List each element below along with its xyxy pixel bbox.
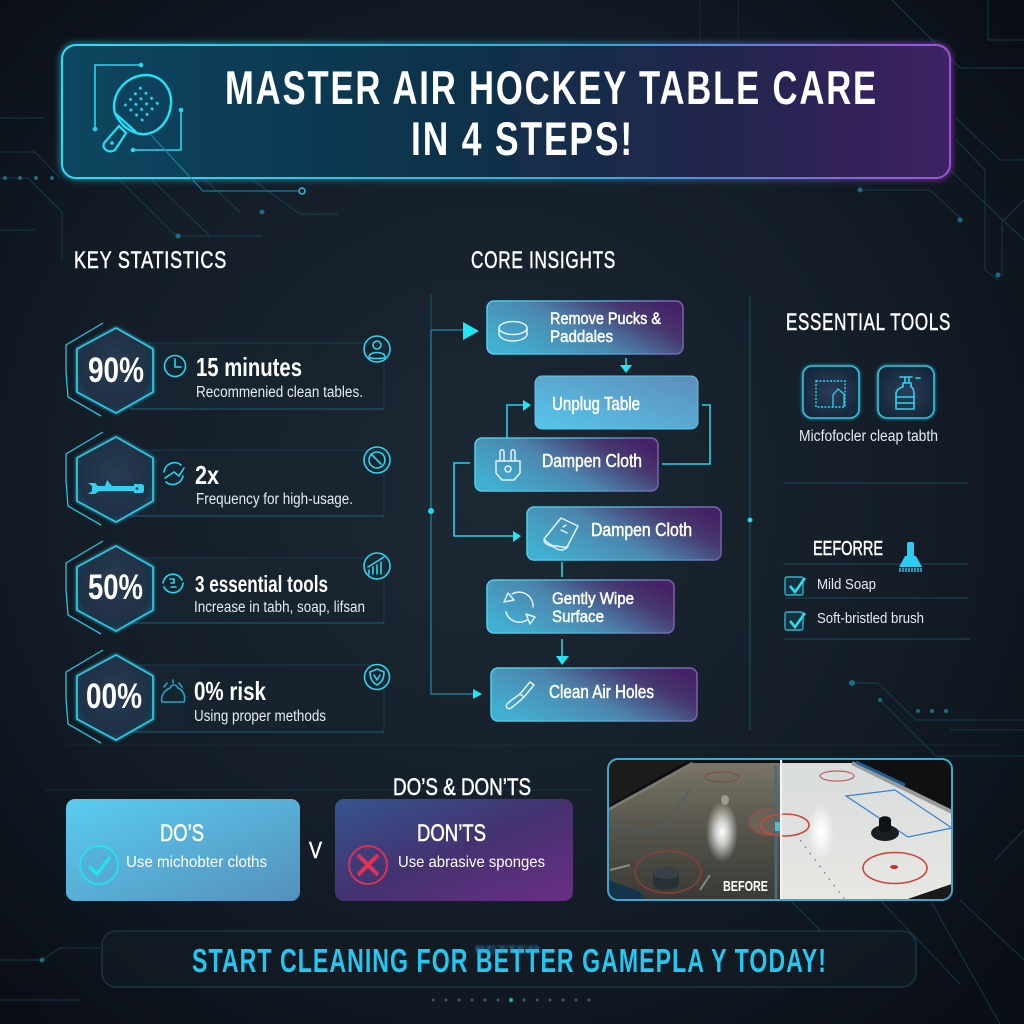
step label: Dampen Cloth [591,520,692,540]
panel: do's: DO’S [160,820,204,847]
panel: stat 50% [66,541,390,634]
dim vertical dividers [431,294,750,730]
panel: do's [66,799,300,901]
panel: do's: Use michobter cloths [126,854,267,871]
title banner [62,45,950,178]
call to action bar [102,931,916,987]
stat text [194,676,326,725]
icon: cycle [163,574,183,593]
panel: don'ts: DON’TS [417,820,486,847]
heading: key statistics: KEY STATISTICS [74,247,227,274]
icon: cloth [544,518,578,550]
icon: plug [496,450,520,480]
stat text: 2x [195,460,219,490]
stat text: 15 minutes [196,352,302,382]
hexagon value [77,328,153,413]
panel: stat 00% [66,650,390,743]
icon: rising bars [364,553,390,579]
icon: check circle [80,846,118,884]
before label: BEFORE [723,878,768,895]
step label: Remove Pucks & [550,309,662,328]
step label: Gently Wipe [552,589,634,608]
icon: refresh [164,463,184,484]
stat text [194,571,365,616]
icon: cross circle [349,846,387,884]
flow connectors [428,322,752,699]
hexagon value [77,546,153,631]
heading: essential tools: ESSENTIAL TOOLS [786,309,951,336]
icon: microfiber cloth tile [803,366,859,418]
tools caption: Micfofocler cleap tabth [799,428,938,445]
check item: mild soap: Mild Soap [817,576,876,593]
step label [550,309,662,346]
icon: puck [499,322,527,341]
step label [552,589,634,626]
flow step: dampen cloth [527,507,721,560]
after half [761,759,952,900]
title text [225,61,878,165]
hexagon value: 90% [88,351,144,390]
step label: Paddales [550,327,613,346]
hexagon value: 50% [88,568,143,607]
stat text: Recommenied clean tables. [196,384,363,401]
step label: Clean Air Holes [549,682,654,702]
hexagon with wrench [77,437,153,522]
stat text: 3 essential tools [195,571,328,597]
panel: essential tools [783,366,970,639]
checklist heading: EEFORRE [813,538,883,560]
hexagon value: 00% [86,677,142,716]
heading: core insights: CORE INSIGHTS [471,247,616,274]
step label: Unplug Table [552,394,640,414]
stat text [196,352,363,401]
call to action bar: BETTER [475,945,540,956]
step label: Surface [552,607,604,626]
checklist: before [785,538,924,630]
photo: before and after table [608,759,952,900]
flow step: gently wipe surface [487,580,674,633]
icon: spray bottle tile [878,366,934,418]
title text: IN 4 STEPS! [411,112,634,165]
panel: don'ts [335,799,573,901]
stat text [195,460,353,508]
icon: clock [164,356,186,376]
flow step: clean air holes [491,668,697,721]
icon: person [364,336,390,362]
icon: gauge [364,447,390,473]
panel: stat 90% [66,323,390,416]
icon: small brush [506,682,534,709]
hexagon value [77,655,153,740]
pagination dots [432,998,590,1002]
before half [608,759,791,900]
flow step: unplug table [535,376,698,429]
check item: soft brush: Soft-bristled brush [817,610,924,627]
stat text: 0% risk [194,676,266,706]
stat text: Frequency for high-usage. [196,491,353,508]
flow step: remove pucks and paddles [487,301,683,354]
stat text: Using proper methods [194,708,326,725]
icon: alert home [162,680,185,702]
panel: don'ts: Use abrasive sponges [398,854,545,871]
icon: paddle [93,63,183,152]
step label: Dampen Cloth [542,451,642,471]
flow step: dampen cloth with plug [475,438,658,491]
icon: wipe arrows [504,592,535,624]
icon: shield [364,664,390,690]
icon: brush [899,542,922,572]
versus mark: V [309,837,323,863]
heading: do's and don'ts: DO’S & DON’TS [393,774,531,801]
panel: stat 2x [66,432,390,525]
decor: banner circuit tail [150,134,305,194]
stat text: Increase in tabh, soap, lifsan [194,599,365,616]
